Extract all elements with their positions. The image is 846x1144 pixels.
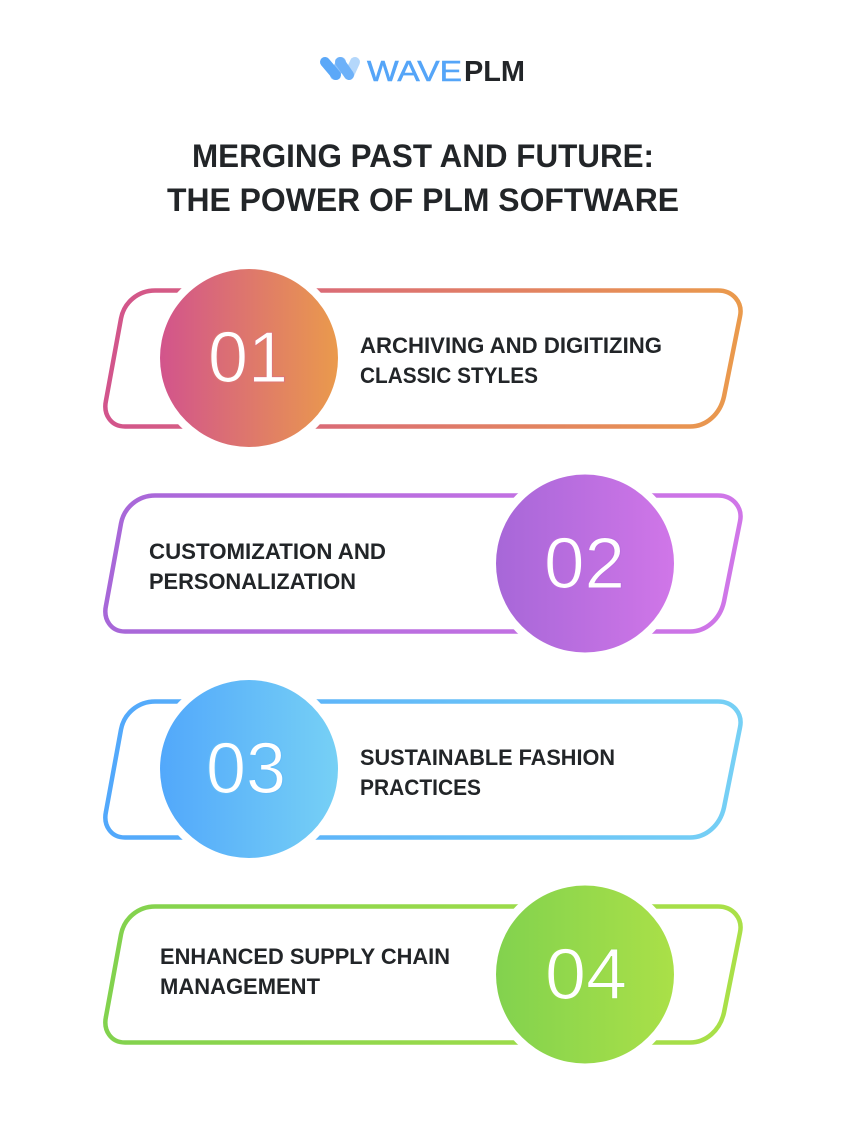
logo wordmark [367,56,525,88]
title [167,138,679,218]
title: MERGING PAST AND FUTURE: [192,138,654,174]
logo wordmark: WAVE [367,56,462,88]
card outline [105,702,741,838]
card outline [105,496,741,632]
number badge [152,672,346,866]
icon: wave W mark [325,62,355,75]
title: THE POWER OF PLM SOFTWARE [167,182,679,218]
label: SUSTAINABLE FASHION [360,745,615,770]
label: CLASSIC STYLES [360,363,538,388]
number badge: 02 [544,524,625,604]
card outline [105,906,741,1042]
label: PERSONALIZATION [149,569,356,594]
number badge [488,466,682,660]
card outline [105,290,741,426]
number badge: 04 [545,935,627,1015]
label: ARCHIVING AND DIGITIZING [360,333,662,358]
panel: 01 archiving [105,261,741,455]
panel: 02 customization [105,466,741,660]
logo: WavePLM [325,56,525,88]
label: MANAGEMENT [160,974,321,999]
logo wordmark: PLM [464,56,525,88]
panel: 04 supply chain [105,878,741,1072]
number badge [488,878,682,1072]
label: PRACTICES [360,775,481,800]
number badge: 03 [206,729,286,809]
label: ENHANCED SUPPLY CHAIN [160,944,450,969]
number badge [152,261,346,455]
panel: 03 sustainable [105,672,741,866]
label: CUSTOMIZATION AND [149,539,386,564]
number badge: 01 [208,318,288,398]
